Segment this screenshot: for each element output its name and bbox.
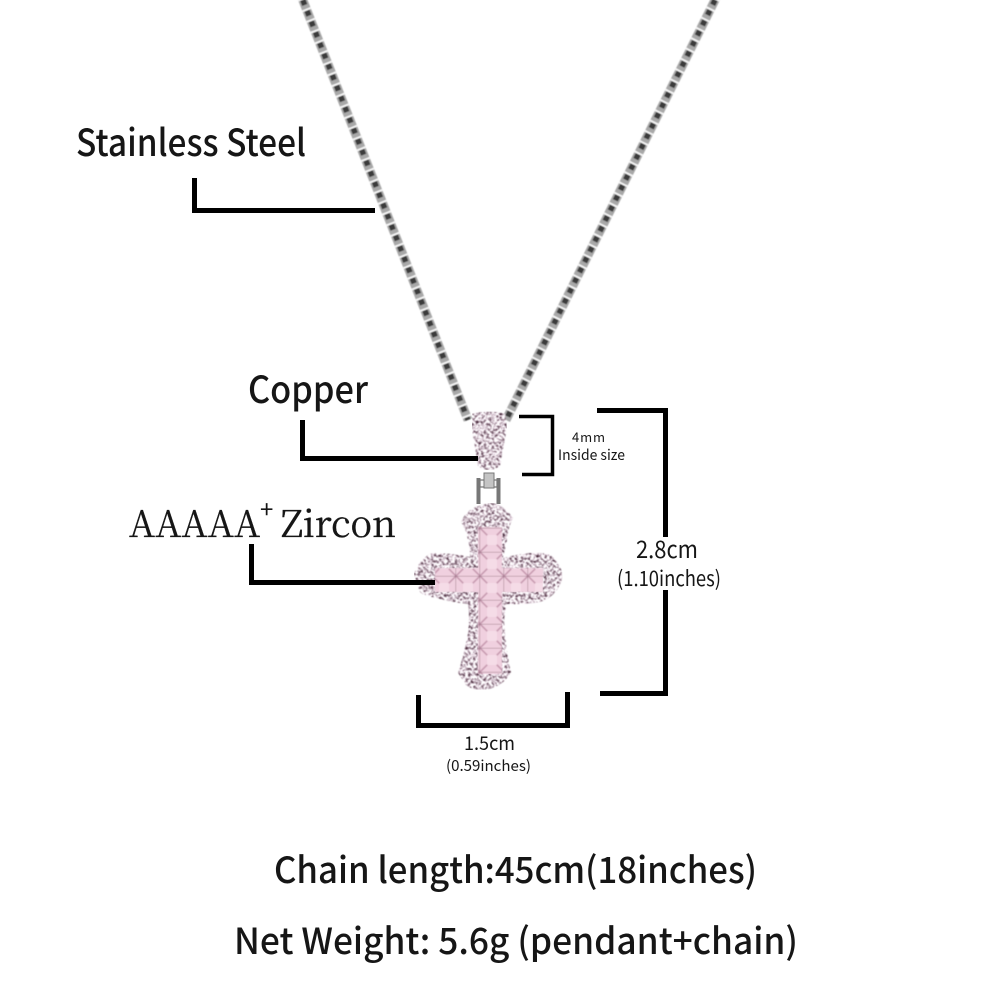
pendant bail <box>472 412 507 504</box>
pink zircon stones <box>435 527 543 674</box>
dimension: width: (0.59inches) <box>446 755 531 776</box>
dimension: inside size: 4mm <box>572 427 605 446</box>
dimension: width: 1.5cm <box>464 729 515 756</box>
callout: zircon: AAAAA <box>129 494 260 548</box>
net weight: Net Weight: 5.6g (pendant+chain) <box>234 913 798 965</box>
callout: stainless steel: Stainless Steel <box>76 113 306 167</box>
dimension: inside size: Inside size <box>558 444 625 465</box>
necklace chain <box>302 0 716 420</box>
callout: zircon: Zircon <box>281 494 396 548</box>
callout: zircon <box>129 490 435 582</box>
callout: stainless steel <box>76 113 375 210</box>
chain length: Chain length:45cm(18inches) <box>274 842 757 894</box>
cross pendant <box>414 503 562 690</box>
callout: copper: Copper <box>248 360 369 414</box>
dimension: height: 2.8cm <box>636 530 698 565</box>
callout: zircon: + <box>260 490 273 525</box>
dimension: inside size <box>519 416 625 474</box>
dimension: height <box>597 410 721 694</box>
connector link <box>478 473 498 504</box>
callout: copper <box>248 360 478 458</box>
dimension: height: (1.10inches) <box>617 563 721 593</box>
dimension: width <box>418 692 568 776</box>
